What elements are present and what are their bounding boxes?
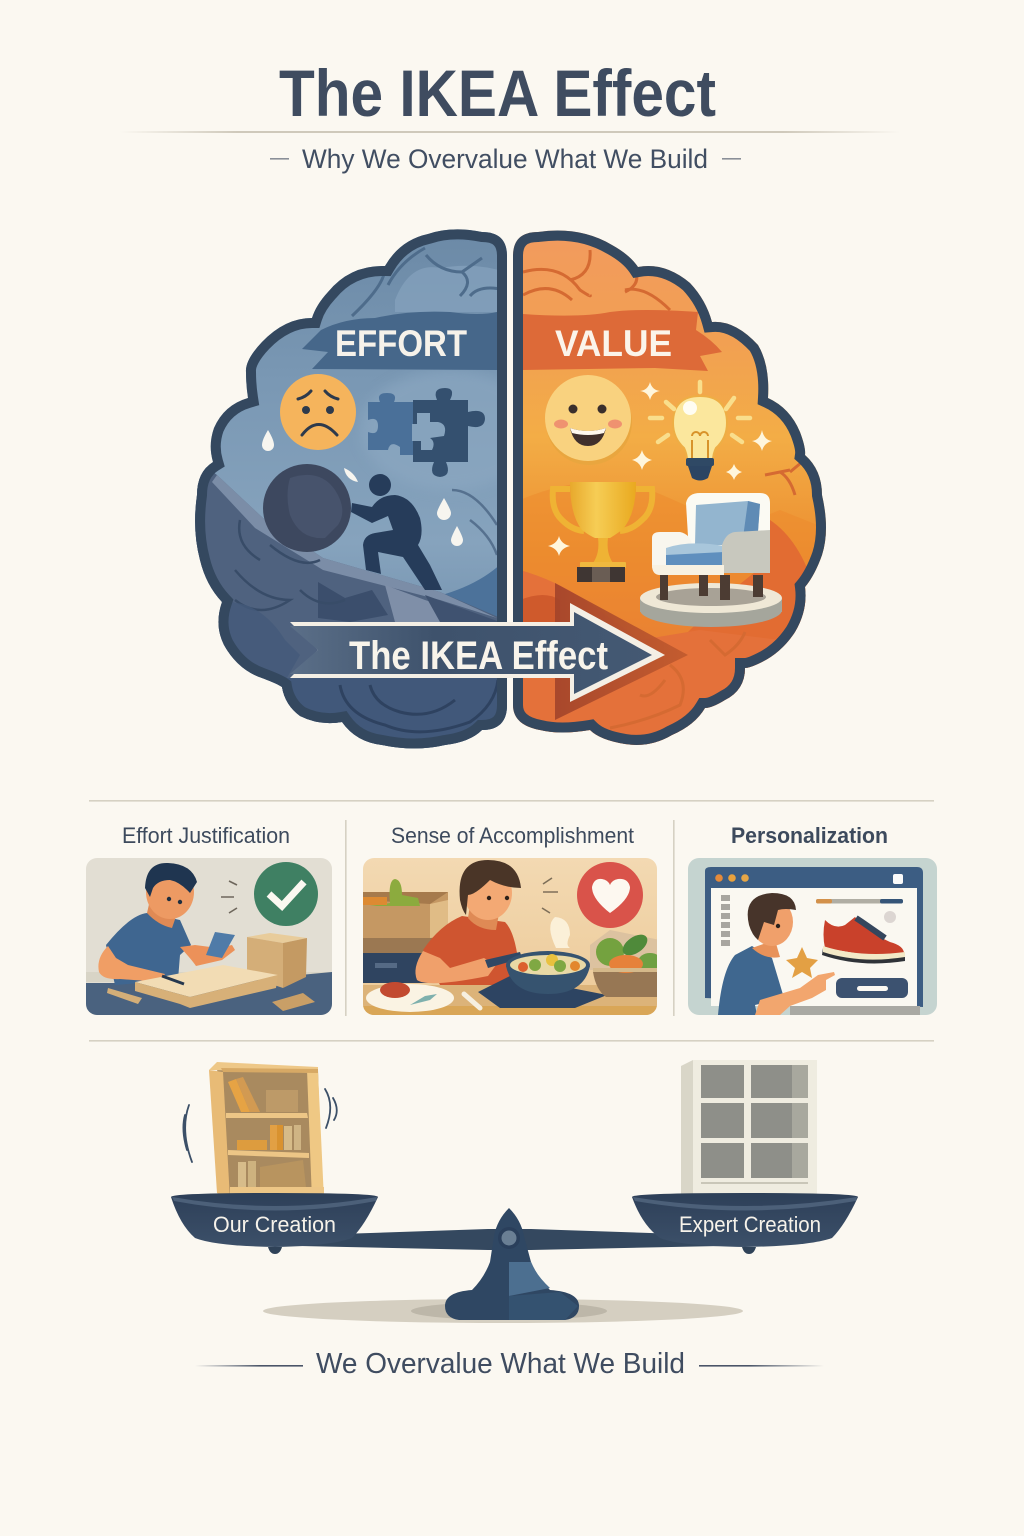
warm lower hills — [520, 482, 830, 760]
icon: trophy — [553, 482, 652, 582]
icon: sad face — [262, 374, 356, 451]
balance scale — [171, 1060, 858, 1323]
icon: puzzle pieces — [368, 388, 485, 477]
icon: happy face — [545, 375, 632, 465]
icon: pedestal — [640, 583, 782, 627]
banner: value — [523, 310, 722, 371]
left pan: Our Creation — [213, 1212, 336, 1237]
left hemisphere: effort — [195, 229, 507, 748]
soft light — [367, 374, 497, 462]
banner: value: VALUE — [555, 323, 672, 364]
bottom lobes — [280, 678, 510, 753]
arrow: the IKEA effect — [290, 583, 688, 720]
wobble lines — [183, 1089, 337, 1162]
heading: Effort Justification — [122, 823, 290, 848]
left bookshelf: our creation — [209, 1062, 324, 1200]
brain illustration — [190, 225, 830, 760]
rock slope — [195, 468, 497, 700]
icon: sparkles — [548, 382, 772, 556]
icon: sweat drops — [344, 468, 463, 546]
right bookshelf: expert creation — [681, 1060, 817, 1200]
section rule — [89, 1040, 934, 1042]
left pan — [171, 1193, 378, 1254]
icon: armchair — [652, 493, 770, 600]
illustration: assembling furniture — [86, 858, 332, 1015]
right pan — [632, 1193, 858, 1254]
illustration: cooking — [363, 858, 662, 1015]
illustration: customising a shoe online — [688, 858, 937, 1015]
panel: effort justification — [86, 823, 332, 1015]
rock facets — [318, 582, 388, 622]
arrow: the IKEA effect: The IKEA Effect — [349, 634, 608, 678]
footer caption: We Overvalue What We Build — [316, 1348, 685, 1380]
heading: Personalization — [731, 823, 888, 848]
lower right blue hill — [445, 568, 497, 616]
title: The IKEA Effect — [279, 56, 716, 130]
icon: pushing figure — [351, 474, 442, 590]
section rule — [89, 800, 934, 802]
right pan: Expert Creation — [679, 1212, 821, 1237]
right hemisphere: value — [510, 225, 830, 760]
scale shadow — [263, 1299, 743, 1323]
heading: Sense of Accomplishment — [391, 823, 634, 848]
panel: personalization — [688, 823, 937, 1015]
subtitle: Why We Overvalue What We Build — [302, 144, 708, 174]
top lobe folds — [395, 266, 505, 312]
icon: boulder — [263, 464, 351, 552]
icon: lightbulb — [650, 382, 750, 480]
banner: effort: EFFORT — [335, 323, 467, 364]
beam — [300, 1229, 720, 1250]
fulcrum base — [445, 1208, 579, 1320]
banner: effort — [302, 312, 497, 370]
brain folds — [523, 250, 802, 728]
panel: sense of accomplishment — [363, 823, 662, 1015]
